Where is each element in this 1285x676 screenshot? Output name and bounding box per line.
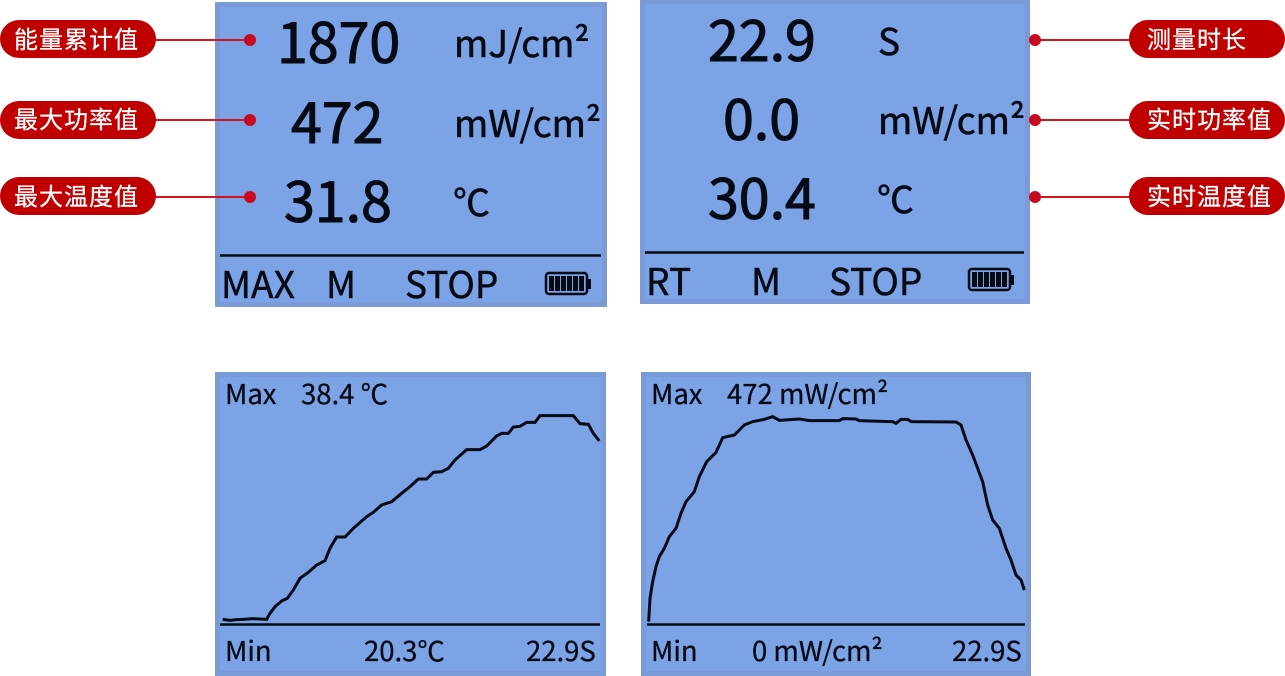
callout: real-time temperature: 实时温度值 — [1147, 177, 1272, 212]
chart: temperature line — [223, 416, 599, 620]
label: min power: Min — [651, 629, 698, 669]
callout: max power — [0, 100, 256, 139]
reading: real-time temperature: 30.4 — [708, 155, 816, 235]
value: duration: 22.9S — [952, 629, 1022, 669]
unit: real-time temperature: ℃ — [877, 170, 914, 224]
reading: max power: 472 — [291, 79, 383, 159]
status: RT: RT — [646, 252, 691, 306]
callout: measurement duration: 测量时长 — [1147, 20, 1247, 55]
unit: real-time power: mW/cm² — [878, 91, 1025, 145]
icon: battery — [969, 269, 1014, 290]
reading: max temperature: 31.8 — [284, 158, 392, 238]
value: min power: 0 mW/cm² — [752, 629, 883, 669]
unit: energy: mJ/cm² — [454, 14, 590, 68]
status: MAX: MAX — [221, 255, 295, 309]
callout: measurement duration — [1029, 20, 1285, 58]
status: M: M — [751, 252, 781, 306]
callout: max temperature — [0, 177, 256, 215]
value: max power: 472 mW/cm² — [727, 372, 888, 412]
label: min temperature: Min — [225, 629, 272, 669]
value: max temperature: 38.4 ℃ — [301, 372, 388, 412]
panel: max readings screen — [218, 0, 604, 309]
status: STOP: STOP — [405, 255, 498, 309]
value: duration: 22.9S — [526, 629, 596, 669]
unit: power: mW/cm² — [454, 94, 601, 148]
panel: real-time readings screen — [642, 0, 1028, 306]
unit: seconds: S — [878, 12, 900, 66]
reading: accumulated energy: 1870 — [277, 0, 400, 79]
status: STOP: STOP — [829, 252, 922, 306]
icon: battery — [546, 273, 591, 294]
label: max temperature: Max — [225, 372, 277, 412]
callout: real-time power — [1029, 100, 1285, 139]
status: M: M — [326, 255, 356, 309]
callout: real-time power: 实时功率值 — [1147, 100, 1272, 135]
panel: power curve screen — [644, 372, 1028, 674]
chart: power line — [649, 417, 1024, 622]
unit: temperature: ℃ — [453, 173, 490, 227]
reading: real-time power: 0.0 — [723, 76, 800, 156]
callout: real-time temperature — [1029, 177, 1285, 215]
callout: max temperature: 最大温度值 — [14, 177, 139, 212]
label: max power: Max — [651, 372, 703, 412]
callout: accumulated energy: 能量累计值 — [14, 20, 139, 55]
value: min temperature: 20.3℃ — [364, 629, 445, 669]
callout: max power: 最大功率值 — [14, 100, 139, 135]
panel: temperature curve screen — [218, 372, 604, 674]
callout: accumulated energy — [0, 20, 256, 58]
